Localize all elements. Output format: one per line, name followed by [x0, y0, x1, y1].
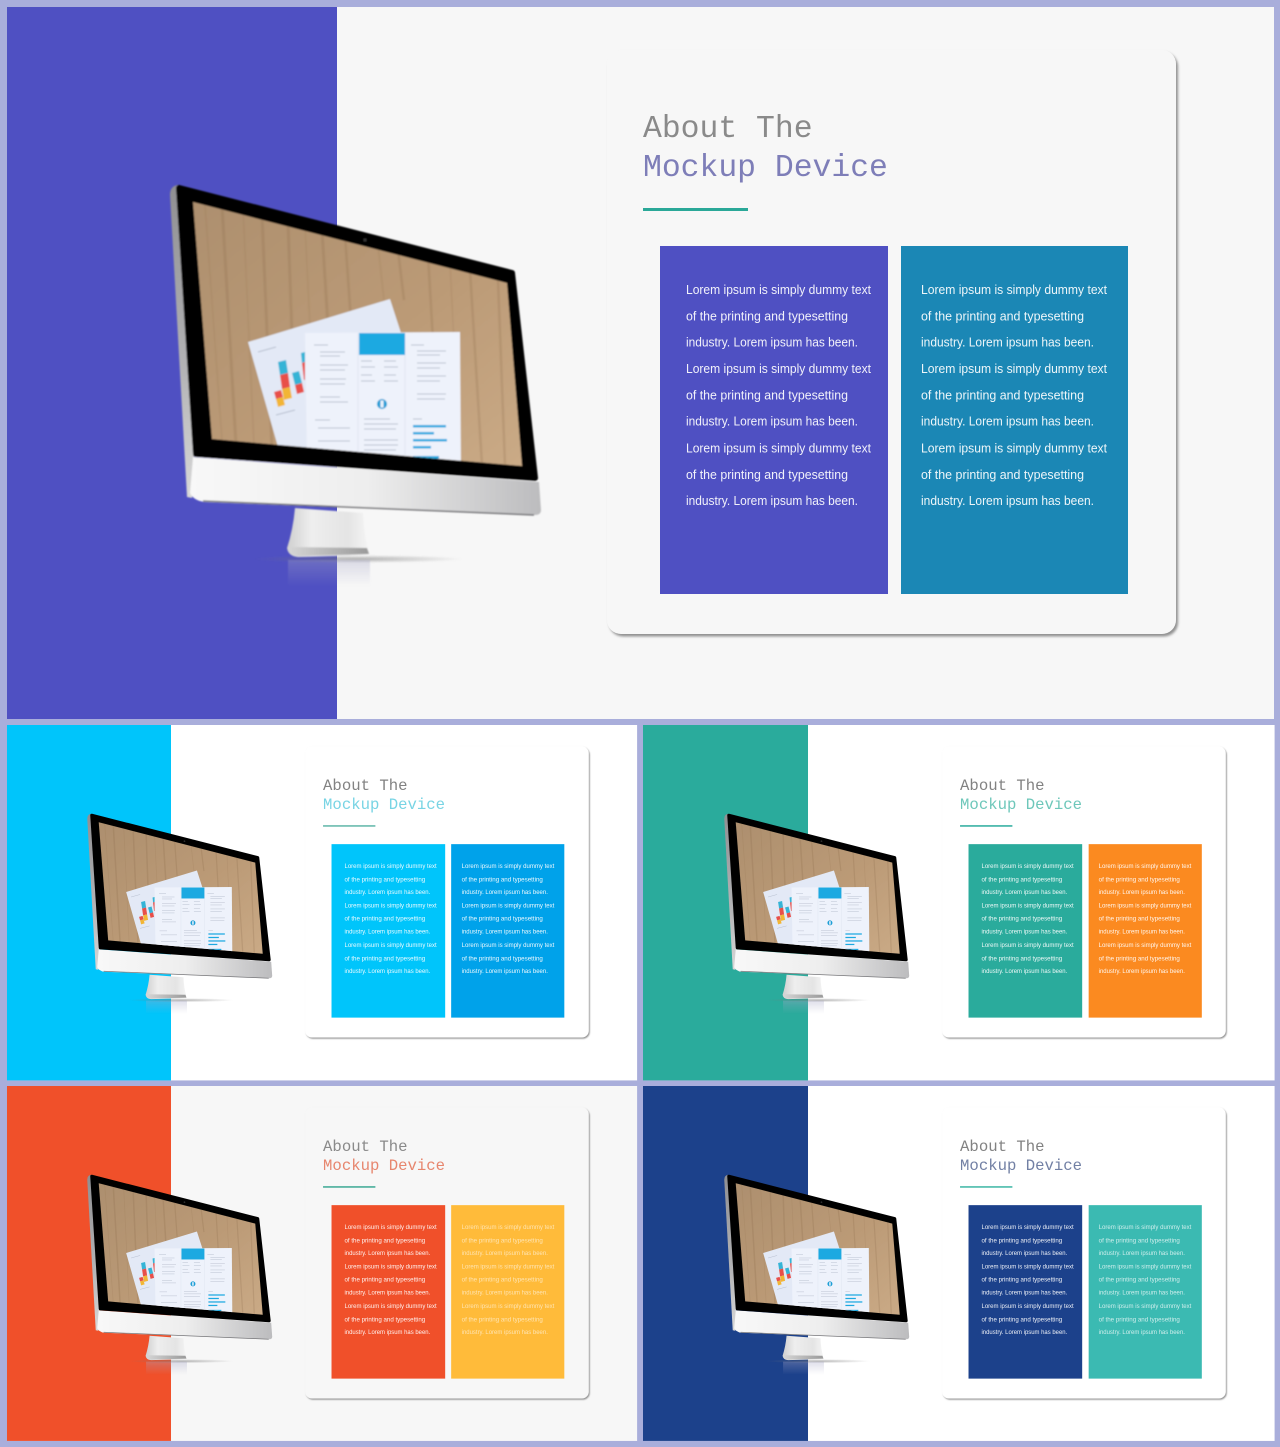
text block: left column: Lorem ipsum is simply dummy text	[344, 863, 437, 870]
text block: right column	[1089, 844, 1202, 1018]
text block: left column: industry. Lorem ipsum has been.	[344, 1290, 430, 1297]
text block: left column: industry. Lorem ipsum has been.	[981, 968, 1067, 975]
text block: left column: of the printing and typesetting	[344, 1277, 426, 1284]
text block: right column: Lorem ipsum is simply dummy text	[462, 902, 555, 909]
text block: left column: of the printing and typesetting	[344, 1316, 426, 1323]
text block: right column: of the printing and typesetting	[1099, 955, 1180, 962]
text block: left column: Lorem ipsum is simply dummy text	[981, 1224, 1074, 1231]
text block: right column: industry. Lorem ipsum has been.	[462, 889, 548, 896]
text block: left column: Lorem ipsum is simply dummy text	[686, 440, 871, 456]
icon: desktop monitor mockup	[724, 1175, 909, 1375]
colour side panel	[643, 725, 808, 1080]
slide: cyan	[7, 725, 637, 1080]
content card	[942, 746, 1226, 1038]
text block: right column: industry. Lorem ipsum has been.	[1099, 889, 1185, 896]
text block: right column: Lorem ipsum is simply dummy text	[462, 863, 555, 870]
text block: left column: industry. Lorem ipsum has been.	[981, 1329, 1067, 1336]
text block: right column: industry. Lorem ipsum has been.	[1099, 968, 1185, 975]
text block: right column: industry. Lorem ipsum has been.	[921, 493, 1094, 508]
text block: right column: industry. Lorem ipsum has been.	[462, 1250, 548, 1257]
icon: desktop monitor mockup	[87, 814, 272, 1014]
text block: left column	[969, 1205, 1082, 1379]
title accent line	[960, 1186, 1012, 1188]
text block: right column: of the printing and typesetting	[462, 955, 543, 962]
text block: left column: Lorem ipsum is simply dummy text	[981, 942, 1074, 949]
text block: left column: of the printing and typesetting	[981, 1237, 1063, 1244]
text block: left column: of the printing and typesetting	[981, 1277, 1063, 1284]
title	[323, 777, 445, 814]
text block: left column: industry. Lorem ipsum has been.	[686, 493, 858, 508]
title accent line	[323, 1186, 375, 1188]
text block: right column: industry. Lorem ipsum has been.	[921, 414, 1094, 428]
text block: right column: Lorem ipsum is simply dummy text	[921, 282, 1107, 297]
text block: right column: Lorem ipsum is simply dummy text	[1099, 1224, 1192, 1231]
text block: right column: Lorem ipsum is simply dummy text	[462, 1224, 555, 1231]
title: About The	[960, 777, 1045, 795]
title	[960, 777, 1082, 814]
text block: left column: industry. Lorem ipsum has been.	[981, 889, 1067, 896]
title: Mockup Device	[960, 1157, 1082, 1175]
text block: right column: of the printing and typesetting	[921, 467, 1084, 482]
slide background	[7, 1086, 637, 1441]
text block: left column: industry. Lorem ipsum has been.	[981, 929, 1067, 936]
content card	[607, 50, 1176, 634]
colour side panel	[7, 1086, 171, 1441]
text block: right column: industry. Lorem ipsum has been.	[1099, 1329, 1185, 1336]
slide background	[643, 725, 1275, 1080]
text block: right column: Lorem ipsum is simply dummy text	[1099, 902, 1192, 909]
title: About The	[960, 1138, 1045, 1156]
icon: desktop monitor mockup	[87, 1175, 272, 1375]
text block: left column: of the printing and typesetting	[344, 955, 426, 962]
text block: right column: industry. Lorem ipsum has been.	[1099, 1290, 1185, 1297]
text block: left column: of the printing and typesetting	[344, 916, 426, 923]
title accent line	[323, 825, 375, 827]
text block: left column: Lorem ipsum is simply dummy text	[344, 902, 437, 909]
content card	[305, 746, 589, 1038]
text block: right column: industry. Lorem ipsum has been.	[462, 929, 548, 936]
text block: left column: industry. Lorem ipsum has been.	[981, 1290, 1067, 1297]
slide background	[7, 725, 637, 1080]
text block: right column: of the printing and typesetting	[1099, 916, 1180, 923]
title: Mockup Device	[323, 1157, 445, 1175]
text block: left column	[332, 844, 445, 1018]
text block: right column: Lorem ipsum is simply dummy text	[1099, 863, 1192, 870]
colour side panel	[643, 1086, 808, 1441]
text block: left column: of the printing and typesetting	[344, 876, 426, 883]
text block: right column: Lorem ipsum is simply dummy text	[1099, 1263, 1192, 1270]
text block: left column: Lorem ipsum is simply dummy text	[344, 1224, 437, 1231]
text block: right column: of the printing and typesetting	[1099, 1237, 1180, 1244]
text block: left column: Lorem ipsum is simply dummy text	[981, 902, 1074, 909]
text block: left column: industry. Lorem ipsum has been.	[344, 968, 430, 975]
title	[323, 1138, 445, 1175]
text block: right column: industry. Lorem ipsum has been.	[462, 968, 548, 975]
text block: right column: of the printing and typesetting	[1099, 1316, 1180, 1323]
text block: right column: Lorem ipsum is simply dummy text	[462, 942, 555, 949]
title	[643, 112, 888, 186]
slide: navy	[643, 1086, 1275, 1441]
text block: right column: Lorem ipsum is simply dummy text	[1099, 1303, 1192, 1310]
text block: right column: of the printing and typesetting	[462, 1237, 543, 1244]
title: Mockup Device	[643, 151, 888, 186]
slide background	[643, 1086, 1275, 1441]
colour side panel	[7, 7, 337, 719]
text block: left column: of the printing and typesetting	[981, 955, 1063, 962]
text block: left column: Lorem ipsum is simply dummy text	[686, 361, 871, 376]
text block: left column: Lorem ipsum is simply dummy text	[981, 863, 1074, 870]
text block: left column: of the printing and typesetting	[981, 876, 1063, 883]
title	[960, 1138, 1082, 1175]
text block: right column: Lorem ipsum is simply dummy text	[921, 361, 1107, 376]
title: About The	[643, 112, 813, 147]
title: Mockup Device	[960, 796, 1082, 814]
text block: left column: Lorem ipsum is simply dummy text	[344, 1263, 437, 1270]
text block: right column: Lorem ipsum is simply dummy text	[1099, 942, 1192, 949]
slide: teal	[643, 725, 1275, 1080]
text block: left column: of the printing and typesetting	[981, 1316, 1063, 1323]
text block: right column: industry. Lorem ipsum has been.	[462, 1290, 548, 1297]
text block: left column: industry. Lorem ipsum has been.	[981, 1250, 1067, 1257]
text block: right column: of the printing and typesetting	[462, 1316, 543, 1323]
title accent line	[960, 825, 1012, 827]
text block: left column: of the printing and typesetting	[686, 388, 848, 402]
text block: left column: of the printing and typesetting	[344, 1237, 426, 1244]
text block: right column	[1089, 1205, 1202, 1379]
text block: right column	[451, 844, 564, 1018]
text block: left column	[660, 246, 888, 594]
text block: right column: of the printing and typesetting	[462, 916, 543, 923]
text block: left column: of the printing and typesetting	[981, 916, 1063, 923]
title accent line	[643, 208, 748, 211]
text block: right column: of the printing and typesetting	[1099, 876, 1180, 883]
slide: orange-red	[7, 1086, 637, 1441]
text block: left column: Lorem ipsum is simply dummy text	[344, 1303, 437, 1310]
title: About The	[323, 777, 408, 795]
text block: left column: industry. Lorem ipsum has been.	[344, 889, 430, 896]
text block: left column	[332, 1205, 445, 1379]
text block: left column: industry. Lorem ipsum has been.	[344, 1329, 430, 1336]
text block: left column	[969, 844, 1082, 1018]
icon: desktop monitor mockup	[724, 814, 909, 1014]
text block: right column: Lorem ipsum is simply dummy text	[462, 1303, 555, 1310]
content card	[305, 1107, 589, 1399]
colour side panel	[7, 725, 171, 1080]
text block: right column: Lorem ipsum is simply dummy text	[921, 440, 1107, 456]
text block: right column: industry. Lorem ipsum has been.	[1099, 1250, 1185, 1257]
text block: right column	[901, 246, 1128, 594]
text block: left column: of the printing and typesetting	[686, 467, 848, 482]
text block: right column: industry. Lorem ipsum has been.	[462, 1329, 548, 1336]
text block: right column: of the printing and typesetting	[462, 1277, 543, 1284]
text block: left column: industry. Lorem ipsum has been.	[344, 929, 430, 936]
text block: left column: industry. Lorem ipsum has been.	[686, 414, 858, 428]
text block: left column: Lorem ipsum is simply dummy text	[981, 1303, 1074, 1310]
icon: desktop monitor mockup	[170, 185, 541, 586]
text block: right column: of the printing and typesetting	[921, 388, 1084, 402]
content card	[942, 1107, 1226, 1399]
text block: left column: industry. Lorem ipsum has been.	[686, 334, 858, 350]
text block: right column: of the printing and typesetting	[1099, 1277, 1180, 1284]
text block: left column: Lorem ipsum is simply dummy text	[686, 282, 871, 297]
text block: left column: of the printing and typesetting	[686, 308, 848, 324]
text block: left column: Lorem ipsum is simply dummy text	[344, 942, 437, 949]
text block: left column: industry. Lorem ipsum has been.	[344, 1250, 430, 1257]
text block: right column: of the printing and typesetting	[462, 876, 543, 883]
slide background	[7, 7, 1274, 719]
text block: right column: of the printing and typesetting	[921, 308, 1084, 324]
text block: right column	[451, 1205, 564, 1379]
title: Mockup Device	[323, 796, 445, 814]
text block: right column: industry. Lorem ipsum has been.	[1099, 929, 1185, 936]
title: About The	[323, 1138, 408, 1156]
text block: right column: industry. Lorem ipsum has been.	[921, 334, 1094, 350]
slide: large indigo	[7, 7, 1274, 719]
text block: right column: Lorem ipsum is simply dummy text	[462, 1263, 555, 1270]
text block: left column: Lorem ipsum is simply dummy text	[981, 1263, 1074, 1270]
